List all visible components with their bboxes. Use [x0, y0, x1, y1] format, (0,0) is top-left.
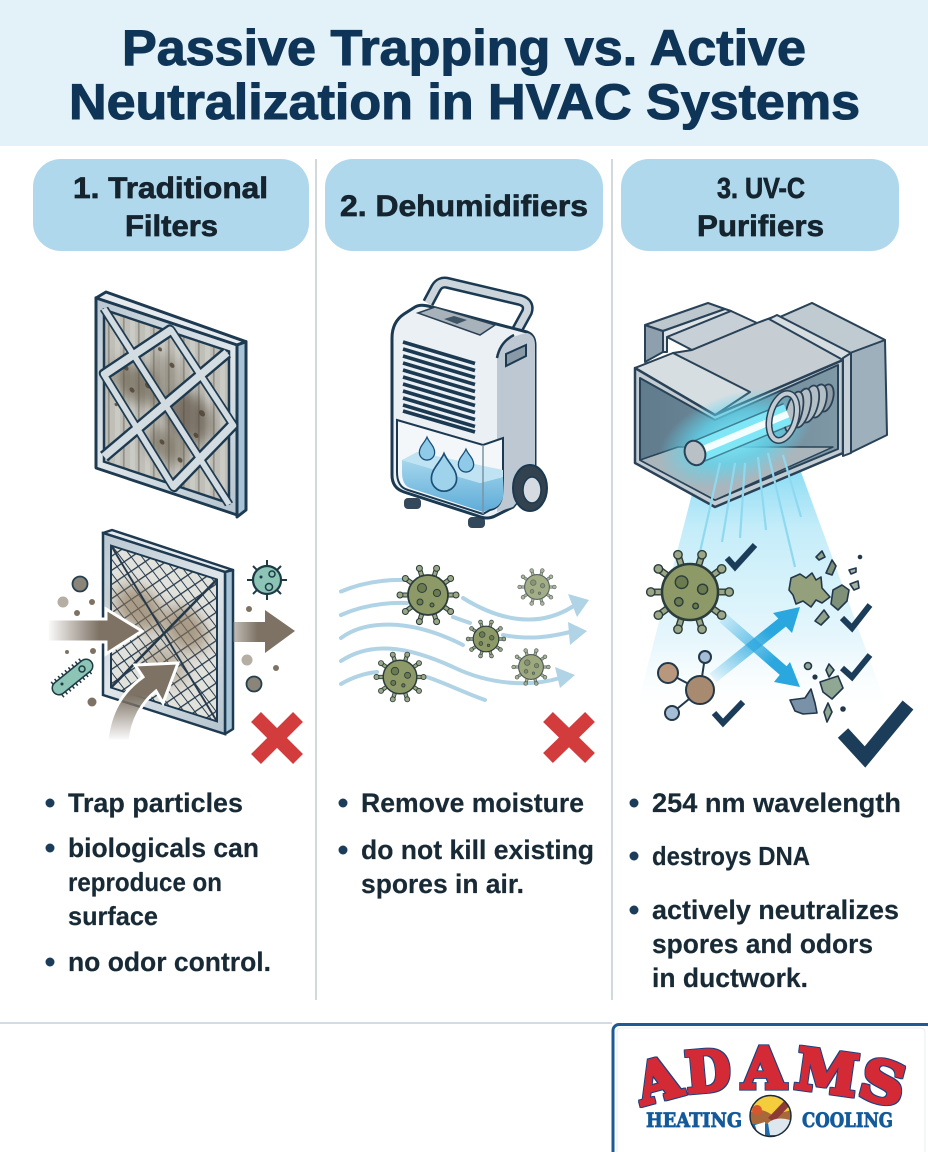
uv light beam [637, 450, 887, 707]
large check mark [843, 705, 908, 757]
uv rays [700, 453, 801, 567]
bullet list: uv-c: 254 nm wavelength [652, 788, 901, 818]
arrow: air leaving [233, 610, 295, 653]
bullet list: uv-c: destroys DNA [652, 841, 810, 871]
bullet list: dehumidifiers: do not kill existing [361, 835, 594, 865]
bullet list: uv-c: actively neutralizes [652, 895, 899, 925]
icon: dehumidifier unit [392, 283, 547, 528]
logo: adams heating and cooling: HEATING [646, 1108, 742, 1132]
heading: dehumidifiers: 2. Dehumidifiers [340, 190, 588, 223]
destroyed spore fragments [789, 551, 862, 625]
heading: traditional filters: 1. Traditional [73, 172, 268, 205]
logo emblem [750, 1095, 792, 1137]
heading: uv-c purifiers: Purifiers [697, 210, 824, 243]
panel: dehumidifiers [325, 159, 603, 899]
small check marks [714, 545, 870, 723]
icon: red x [548, 717, 590, 758]
icon: odor molecule [658, 651, 714, 720]
title banner [0, 0, 928, 146]
bullet list: dehumidifiers: Remove moisture [361, 788, 584, 818]
icon: spore [647, 551, 733, 633]
logo: adams heating and cooling: COOLING [802, 1108, 893, 1132]
heading: dehumidifiers [325, 159, 603, 251]
logo: adams heating and cooling: A [741, 1036, 787, 1102]
icon: filter with trapped particles [103, 530, 233, 734]
arrow: curved particles entering [107, 663, 178, 741]
bullet list: filters: biologicals can [68, 833, 259, 863]
heading: uv-c purifiers [621, 159, 899, 251]
bullet list: filters [46, 788, 271, 977]
cross arrows [713, 607, 800, 687]
logo: adams heating and cooling: M [792, 1036, 862, 1110]
title banner: Neutralization in HVAC Systems [69, 74, 860, 130]
bullet list: filters: no odor control. [68, 947, 271, 977]
bullet list: dehumidifiers [338, 788, 594, 899]
heading: traditional filters [33, 159, 309, 251]
logo: adams heating and cooling: S [853, 1045, 913, 1120]
icon: dirty pleated filter [96, 292, 246, 517]
logo: adams heating and cooling: D [683, 1036, 733, 1106]
bullet list: uv-c: in ductwork. [652, 963, 808, 993]
icon: red x [256, 717, 298, 759]
panel: traditional filters [33, 159, 309, 977]
airflow arrows [341, 580, 589, 700]
panel: uv-c purifiers [621, 159, 908, 993]
icon: hvac duct with uv lamp [635, 303, 887, 507]
bullet list: filters: reproduce on [68, 867, 222, 897]
bullet list: filters: Trap particles [68, 788, 243, 818]
spores in airflow [374, 565, 556, 702]
neutralized odor fragments [790, 662, 845, 722]
particles [58, 576, 279, 706]
arrow: particles entering [47, 609, 142, 654]
heading: uv-c purifiers: 3. UV-C [717, 173, 805, 205]
bullet list: uv-c [630, 788, 901, 993]
icon: bacterium [57, 664, 88, 690]
logo: adams heating and cooling [613, 1024, 928, 1152]
bullet list: filters: surface [68, 901, 158, 931]
heading: traditional filters: Filters [125, 210, 218, 243]
bullet list: uv-c: spores and odors [652, 929, 873, 959]
title banner: Passive Trapping vs. Active [122, 20, 806, 76]
icon: teal virus [247, 560, 287, 600]
bullet list: dehumidifiers: spores in air. [361, 869, 524, 899]
logo: adams heating and cooling: A [628, 1043, 689, 1119]
